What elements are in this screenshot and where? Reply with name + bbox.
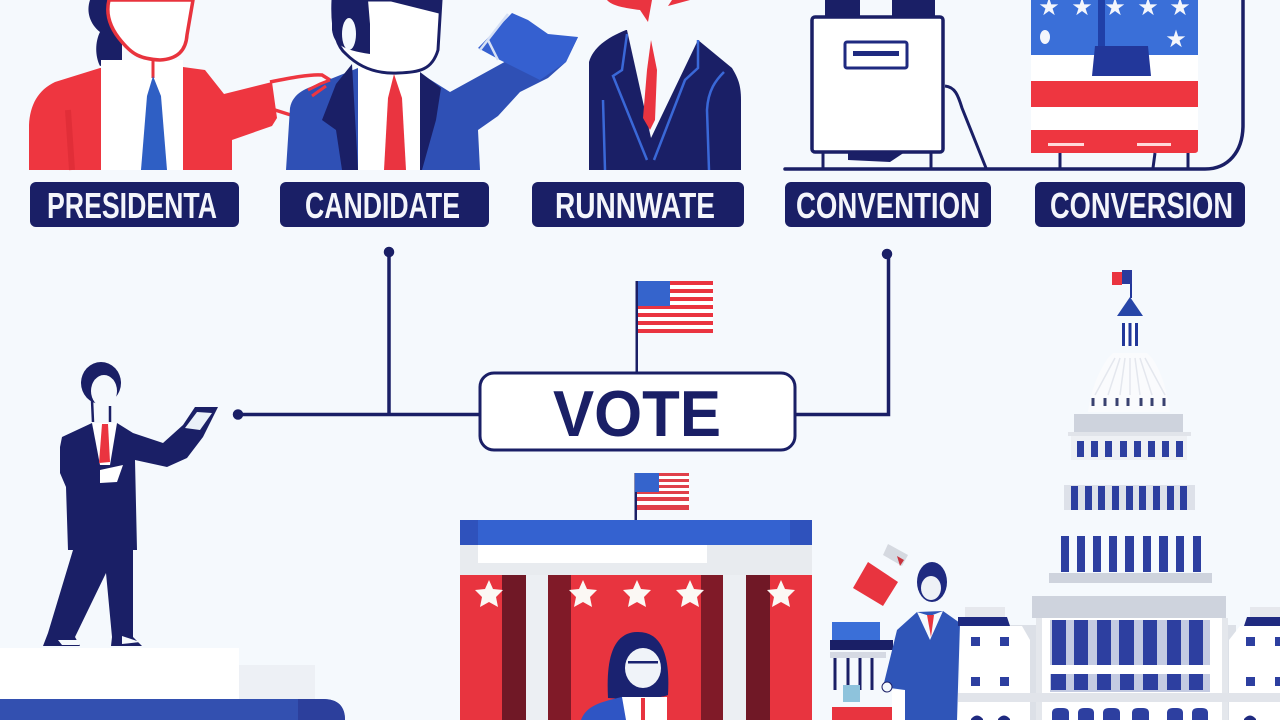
connector: base line along ballot box and flag	[785, 0, 1243, 169]
capitol wings	[958, 607, 1280, 720]
connector: right bracket to vote box	[795, 250, 890, 414]
figure: man presenting with phone	[43, 362, 218, 646]
capitol portico	[958, 596, 1280, 720]
label: CONVENTION: CONVENTION	[796, 185, 980, 226]
drum tiers	[1049, 414, 1212, 583]
figure: running mate in navy suit	[589, 0, 741, 170]
icon: ballot box	[812, 0, 986, 168]
podium building	[460, 473, 812, 720]
flag panel legs	[1060, 153, 1188, 168]
vote box: VOTE	[553, 377, 721, 450]
figure: candidate with raised arm	[286, 0, 578, 170]
figure: man with ballots at right	[830, 544, 960, 720]
capitol building	[958, 270, 1280, 720]
vote box	[480, 373, 795, 450]
label: RUNNMATE: RUNNWATE	[555, 185, 715, 226]
desk with supplies	[830, 622, 905, 720]
woman at podium	[581, 632, 668, 720]
label: CANDIDATE: CANDIDATE	[305, 185, 460, 226]
icon: flag panel: ★	[1165, 25, 1187, 53]
icon: flag above vote box	[636, 281, 713, 373]
icon: flag panel	[1031, 0, 1198, 153]
figure: president with hand on candidate shoulder	[29, 0, 330, 170]
pedestal under presenter	[0, 648, 345, 720]
dome	[1088, 353, 1170, 412]
podium flag	[634, 473, 689, 520]
stars row	[475, 580, 795, 607]
connector: left bracket to vote box	[234, 248, 480, 418]
capitol flag and finial	[1112, 270, 1143, 346]
label: PRESIDENTA: PRESIDENTA	[47, 185, 217, 226]
